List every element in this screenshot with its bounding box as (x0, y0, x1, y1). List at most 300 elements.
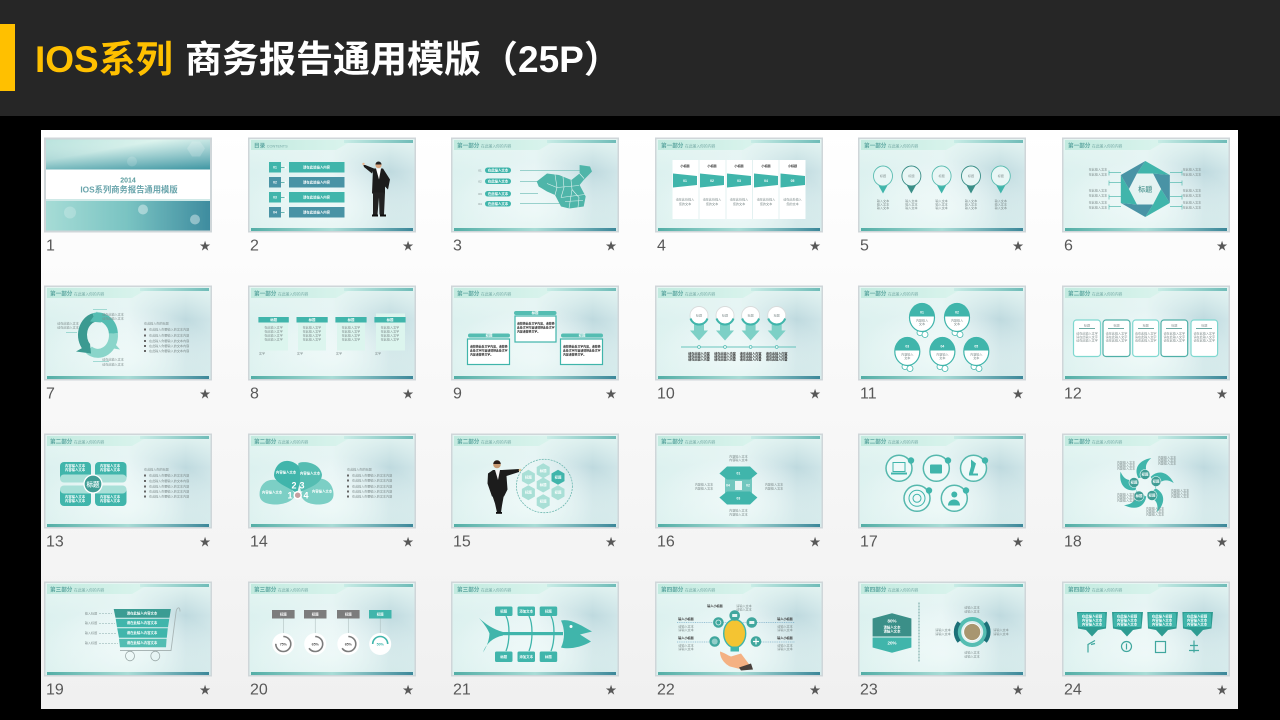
petal diagram: 4 (303, 490, 309, 500)
column cards: 在此输入文字 (342, 324, 360, 330)
cover top band (46, 140, 210, 170)
slide heading: 第二部分 在此输入你的内容 (1068, 290, 1123, 298)
tag shapes: 在此输入标题 (1082, 614, 1103, 618)
star icon: ★ (402, 238, 414, 254)
column cards: 文字 (297, 350, 303, 356)
star icon: ★ (1216, 386, 1228, 402)
bullet list: 在此输入你要输入的文本内容 (149, 484, 189, 488)
slide 9: hanging boxes (451, 286, 619, 380)
contents list: 01 (273, 166, 277, 170)
labels: 输入小标题 (678, 616, 695, 621)
white column panel: 您的文本 (786, 201, 799, 206)
slide heading: 第三部分 在此输入你的内容 (457, 586, 512, 594)
tag shapes: 内容输入文本 (1187, 618, 1208, 622)
numbered circles: 文本 (954, 321, 960, 326)
slide number 11: 11 (860, 386, 877, 402)
tag shapes: 内容输入文本 (1082, 622, 1103, 626)
slide heading: 第三部分 在此输入你的内容 (50, 586, 105, 594)
slide number 5: 5 (860, 238, 869, 254)
star icon: ★ (199, 386, 211, 402)
labels: 请输入文本 (777, 642, 793, 648)
column cards (258, 314, 406, 356)
cross diagram: 01 (737, 472, 740, 476)
pinwheel: 内容输入文本 (1158, 460, 1176, 466)
location pins: 输入文本 (965, 198, 977, 203)
labels: 请输入文本 (678, 624, 694, 628)
white column panel: 请在此处输入 (676, 196, 694, 202)
pill list: 03 (478, 192, 482, 196)
timeline: 标题 (722, 312, 728, 318)
shopping cart: 输入标题 (85, 630, 97, 635)
white column panel: 03 (737, 179, 741, 183)
bullet list: 在此输入你的标题 (144, 466, 169, 472)
slide 11: bubbles (858, 286, 1026, 380)
five cards: 标题 (1171, 322, 1177, 328)
slide heading: 第一部分 在此输入你的内容 (1068, 142, 1123, 150)
slide number 2: 2 (250, 238, 259, 254)
numbered circles: 内容输入 (970, 352, 982, 356)
five cards: 请在此输入文字 (1163, 330, 1185, 336)
cross diagram: 03 (737, 496, 740, 500)
text boxes: 内容请替换文字。 (563, 352, 586, 356)
pinwheel: 内容输入文本 (1146, 506, 1164, 510)
slide 7: cycle (44, 286, 212, 380)
cycle ring: 请在此输入文本 (102, 362, 124, 366)
numbered circles: 04 (941, 344, 944, 348)
cycle ring: 请在此输入文本 (102, 356, 124, 362)
slide 3: map (451, 138, 619, 232)
column cards: 在此输入文字 (264, 336, 283, 342)
star icon: ★ (605, 534, 617, 550)
star icon: ★ (1012, 682, 1024, 698)
slide heading: 第四部分 在此输入你的内容 (661, 586, 716, 594)
slide number 24: 24 (1064, 682, 1082, 698)
five cards: 请在此输入文字 (1163, 338, 1185, 342)
five cards: 请在此输入文字 (1193, 334, 1215, 339)
timeline: 请在此输入内容 (766, 354, 788, 358)
five cards: 请在此输入文字 (1076, 330, 1098, 336)
timeline: 请在此输入内容 (688, 354, 710, 358)
location pins: 输入文本 (935, 198, 948, 203)
labels: 请输入文本 (777, 627, 793, 632)
icon circles (886, 455, 988, 511)
slide number 18: 18 (1064, 534, 1082, 550)
slide number 7: 7 (46, 386, 55, 402)
white column panel: 您的文本 (679, 201, 691, 206)
tag shapes: 内容输入文本 (1152, 622, 1173, 626)
ring diagram: 请输入文本 (964, 654, 980, 658)
location pins: 输入文本 (905, 205, 918, 210)
slide heading: 第一部分 在此输入你的内容 (864, 290, 919, 298)
slide number 13: 13 (46, 534, 64, 550)
bullet list: 在此输入你要输入的文本内容 (352, 478, 392, 482)
labels: 输入小标题 (777, 635, 794, 640)
slide heading: 第一部分 在此输入你的内容 (254, 290, 309, 298)
businessman figure (488, 460, 521, 514)
star icon: ★ (402, 386, 414, 402)
progress rings: 标题 (345, 612, 352, 616)
column cards: 文字 (259, 350, 265, 356)
timeline: 请在此输入内容 (740, 354, 761, 358)
yellow accent bar (0, 24, 15, 91)
five cards: 请在此输入文字 (1135, 330, 1157, 336)
pinwheel: 内容输入文本 (1171, 494, 1189, 498)
column cards: 在此输入文字 (342, 328, 360, 334)
hexagon cluster: 标题 (525, 490, 532, 494)
pill list: 在此输入文本 (488, 201, 509, 206)
text boxes (468, 310, 603, 364)
cycle ring: 请在此输入文本 (102, 312, 124, 316)
text boxes: 请替换此处文字内容，请替换 (517, 320, 555, 326)
cross diagram: 内容输入文本 (729, 508, 748, 512)
shopping cart: 请在此输入内容文本 (127, 630, 158, 635)
star icon: ★ (1012, 238, 1024, 254)
white column panel: 04 (764, 179, 768, 183)
white column panel: 请在此处输入 (783, 196, 802, 202)
contents list: 02 (273, 180, 277, 184)
hexagon cluster: 标题 (540, 498, 547, 504)
contents list: 04 (273, 210, 277, 214)
percent shield: 请输入文本 (884, 628, 901, 634)
cross diagram: 04 (726, 484, 730, 488)
ring diagram: 请输入文本 (993, 631, 1009, 636)
text boxes: 此处文字内容请替换此处文字 (470, 348, 508, 352)
hexagon diagram (1089, 161, 1201, 217)
hexagon diagram: 在此输入文本 (1183, 204, 1201, 210)
timeline: 请在此输入内容 (688, 356, 710, 362)
location pins: 标题 (968, 173, 974, 178)
percent shield (873, 613, 911, 653)
location pins: 输入文本 (935, 205, 948, 210)
slide heading: 第一部分 在此输入你的内容 (50, 290, 105, 298)
cross diagram: 02 (746, 484, 750, 488)
column cards: 在此输入文字 (264, 324, 283, 330)
hexagon diagram: 在此输入文本 (1089, 188, 1107, 192)
five cards: 请在此输入文字 (1106, 330, 1127, 336)
slide heading: 第一部分 在此输入你的内容 (864, 142, 919, 150)
timeline: 请在此输入内容 (740, 350, 761, 356)
white column panel: 01 (683, 179, 687, 183)
contents list: 03 (273, 196, 277, 200)
petal diagram: 内容输入文本 (312, 488, 333, 494)
pinwheel: 内容输入文本 (1117, 462, 1135, 468)
tag shapes: 内容输入文本 (1152, 618, 1173, 622)
slide number 4: 4 (657, 238, 666, 254)
white column panel: 您的文本 (733, 201, 745, 206)
pill list: 01 (478, 168, 482, 172)
slide 1: cover (44, 138, 212, 232)
slide number 1: 1 (46, 238, 55, 254)
China map (537, 165, 592, 208)
star icon: ★ (1216, 682, 1228, 698)
column cards: 在此输入文字 (381, 332, 399, 338)
hexagon cluster: 标题 (555, 490, 562, 494)
slide heading: 第一部分 在此输入你的内容 (661, 290, 716, 298)
text boxes: 此处文字内容请替换此处文字 (563, 348, 601, 352)
five cards: 标题 (1201, 322, 1207, 328)
five cards: 请在此输入文字 (1193, 330, 1215, 336)
numbered circles: 内容输入 (916, 318, 928, 322)
five cards: 请在此输入文字 (1163, 334, 1185, 339)
fishbone diagram: 标题 (545, 654, 552, 659)
location pins: 输入文本 (905, 198, 918, 203)
five cards: 标题 (1143, 322, 1149, 328)
star icon: ★ (605, 238, 617, 254)
star icon: ★ (402, 682, 414, 698)
slide 20: progress rings (248, 582, 416, 676)
petal diagram: 2 (291, 480, 297, 490)
petal diagram: 3 (299, 480, 305, 490)
fishbone diagram (479, 606, 592, 662)
slide 16: cross shape (655, 434, 823, 528)
text boxes: 请替换此处文字内容，请替换 (563, 344, 601, 348)
white column panel: 您的文本 (706, 201, 718, 206)
bullet list: 在此输入你要输入的文本内容 (149, 326, 189, 332)
cycle ring: 请在此输入文本 (102, 316, 124, 320)
bullet list: 在此输入你要输入的文本内容 (149, 494, 189, 498)
star icon: ★ (199, 682, 211, 698)
slide 12: cards (1062, 286, 1230, 380)
title: IOS系列 (35, 39, 173, 80)
text boxes: 标题 (486, 332, 493, 338)
location pins: 输入文本 (877, 202, 889, 206)
column cards: 标题 (348, 317, 355, 322)
white column panel: 请在此处输入 (757, 196, 775, 202)
location pins: 输入文本 (995, 202, 1007, 206)
location pins: 输入文本 (935, 202, 948, 206)
column cards: 在此输入文字 (264, 332, 283, 338)
column cards: 在此输入文字 (303, 328, 321, 334)
star icon: ★ (809, 534, 821, 550)
white thumbnail panel (41, 130, 1238, 709)
four block diagram: 内容输入文本 (100, 494, 121, 499)
ring diagram: 请输入文本 (964, 650, 980, 654)
tag shapes: 在此输入标题 (1152, 614, 1173, 618)
ring diagram (935, 604, 1009, 658)
bullet list (347, 466, 392, 498)
slide thumbnails (44, 138, 1230, 698)
petal diagram: 内容输入文本 (276, 470, 297, 474)
pinwheel: 内容输入文本 (1158, 458, 1176, 462)
pinwheel: 内容输入文本 (1117, 498, 1135, 502)
location pins: 输入文本 (995, 198, 1007, 203)
timeline: 请在此输入内容 (766, 350, 788, 356)
contents list: 请在此处输入内容 (303, 180, 331, 184)
column cards: 标题 (270, 317, 278, 322)
star icon: ★ (605, 386, 617, 402)
four block diagram: 标题 (86, 480, 100, 488)
progress rings: 65% (312, 642, 320, 646)
numbered circles: 内容输入 (901, 352, 913, 356)
businessman figure (362, 162, 390, 216)
tag shapes: 内容输入文本 (1117, 618, 1138, 622)
numbered circles: 内容输入 (951, 318, 963, 322)
slide heading: 第二部分 在此输入你的内容 (661, 438, 716, 446)
white column panel: 小标题 (734, 163, 745, 168)
column cards: 在此输入文字 (303, 324, 321, 330)
four block diagram: 内容输入文本 (100, 467, 121, 472)
cross diagram: 内容输入文本 (729, 512, 748, 516)
slide heading: 第二部分 在此输入你的内容 (864, 438, 919, 446)
slide 6: hexagon (1062, 138, 1230, 232)
timeline: 标题 (774, 312, 780, 318)
five cards: 标题 (1113, 322, 1120, 328)
location pins: 标题 (998, 173, 1004, 178)
numbered circles: 文本 (904, 355, 910, 360)
slide number 20: 20 (250, 682, 268, 698)
pinwheel: 标题 (1136, 493, 1143, 498)
cover title: 2014 (120, 178, 136, 184)
dashed divider (918, 602, 920, 662)
bullet list: 在此输入你要输入的文本内容 (149, 478, 189, 483)
slide 22: light bulb (655, 582, 823, 676)
pinwheel: 标题 (1149, 492, 1156, 498)
slide heading: 目录 CONTENTS (254, 142, 288, 150)
column cards: 在此输入文字 (342, 332, 360, 338)
text boxes: 内容请替换文字。 (517, 328, 540, 334)
five cards: 标题 (1084, 322, 1090, 328)
percent shield: 20% (887, 640, 897, 646)
slide number 19: 19 (46, 682, 64, 698)
fishbone diagram: 添加文本 (519, 654, 534, 659)
progress rings: 65% (345, 642, 353, 646)
five cards: 请在此输入文字 (1193, 338, 1215, 342)
numbered circles (895, 304, 989, 372)
pill list: 04 (478, 202, 482, 206)
location pins: 标题 (939, 173, 945, 178)
bullet list: 在此输入你要输入的文本内容 (352, 484, 392, 488)
star icon: ★ (199, 238, 211, 254)
timeline (681, 306, 796, 362)
four block diagram: 内容输入文本 (65, 494, 86, 499)
cross diagram: 内容输入文本 (695, 482, 713, 486)
five cards: 请在此输入文字 (1135, 334, 1157, 339)
labels: 请输入文本 (777, 624, 793, 628)
shopping cart: 输入标题 (85, 640, 97, 645)
hexagon cluster: 标题 (540, 482, 547, 487)
numbered circles: 文本 (973, 355, 979, 360)
white column panel: 小标题 (761, 163, 772, 168)
location pins: 输入文本 (995, 205, 1007, 210)
shopping cart: 请在此输入内容文本 (127, 620, 158, 625)
hexagon cluster: 标题 (525, 474, 532, 480)
column cards: 在此输入文字 (381, 328, 399, 334)
slide heading: 第一部分 在此输入你的内容 (457, 142, 512, 150)
pill list (478, 168, 580, 206)
shopping cart (85, 608, 180, 661)
location pins (874, 166, 1010, 210)
labels: 请输入文本 (678, 642, 694, 648)
four block diagram: 内容输入文本 (65, 498, 86, 503)
slide 14: petals (248, 434, 416, 528)
column cards: 标题 (387, 317, 394, 322)
timeline: 请在此输入内容 (714, 350, 736, 356)
shopping cart: 请在此输入内容文本 (127, 640, 158, 645)
slide number 14: 14 (250, 534, 268, 550)
slide number 22: 22 (657, 682, 675, 698)
ring diagram: 请输入文本 (935, 631, 951, 636)
ring diagram: 请输入文本 (993, 627, 1009, 632)
five cards: 请在此输入文字 (1135, 338, 1157, 342)
shopping cart: 输入标题 (85, 610, 97, 616)
slide heading: 第一部分 在此输入你的内容 (661, 142, 716, 150)
timeline: 请在此输入内容 (766, 356, 788, 362)
timeline: 请在此输入内容 (714, 356, 736, 362)
column cards: 标题 (309, 317, 316, 322)
pinwheel: 标题 (1153, 478, 1160, 484)
star icon: ★ (809, 386, 821, 402)
location pins: 标题 (880, 173, 886, 178)
slide number 15: 15 (453, 534, 471, 550)
slide number 21: 21 (453, 682, 471, 698)
petal diagram: 1 (287, 490, 293, 500)
cross diagram: 内容输入文本 (729, 454, 748, 458)
pinwheel: 内容输入文本 (1146, 512, 1164, 516)
pinwheel: 内容输入文本 (1117, 492, 1135, 496)
hexagon diagram: 在此输入文本 (1089, 172, 1107, 176)
bullet list: 在此输入你的标题 (144, 320, 169, 326)
slide 2: contents (248, 138, 416, 232)
bullet list: 在此输入你的标题 (347, 466, 372, 472)
star icon: ★ (809, 238, 821, 254)
timeline: 请在此输入内容 (714, 354, 736, 358)
cycle ring (57, 310, 124, 366)
fishbone diagram: 添加文本 (519, 608, 534, 614)
title: 商务报告通用模版（25P） (185, 39, 621, 80)
pinwheel: 内容输入文本 (1171, 490, 1189, 496)
slide 10: timeline arrows (655, 286, 823, 380)
five cards: 请在此输入文字 (1106, 338, 1127, 342)
slide 4: five columns (655, 138, 823, 232)
four block diagram: 内容输入文本 (65, 467, 86, 472)
contents list (269, 162, 344, 218)
tag shapes (1077, 612, 1213, 636)
labels (678, 603, 794, 651)
numbered circles: 03 (905, 344, 909, 348)
column cards: 在此输入文字 (303, 336, 321, 342)
labels: 输入小标题 (678, 635, 695, 640)
contents list: 请在此处输入内容 (303, 210, 331, 214)
cross diagram: 内容输入文本 (765, 486, 783, 490)
slide 5: pins (858, 138, 1026, 232)
bullet list: 在此输入你要输入的文本内容 (352, 488, 392, 494)
star icon: ★ (1216, 534, 1228, 550)
four block diagram: 内容输入文本 (65, 463, 86, 468)
bullet list: 在此输入你要输入的文本内容 (149, 488, 189, 494)
white column panel: 小标题 (788, 163, 798, 168)
bullet list: 在此输入你要输入的文本内容 (149, 332, 189, 338)
petal diagram: 内容输入文本 (300, 470, 321, 476)
percent shield: 请输入文本 (884, 624, 901, 630)
slide heading: 第四部分 在此输入你的内容 (1068, 586, 1123, 594)
four block diagram: 内容输入文本 (100, 463, 121, 468)
slide heading: 第二部分 在此输入你的内容 (254, 438, 309, 446)
location pins: 输入文本 (965, 205, 977, 210)
slide heading: 第二部分 在此输入你的内容 (457, 438, 512, 446)
labels: 请输入文本 (777, 646, 793, 651)
pill list: 在此输入文本 (488, 191, 509, 196)
cover title: IOS系列商务报告通用模版 (80, 184, 178, 194)
pinwheel (1116, 454, 1189, 516)
slide heading: 第四部分 在此输入你的内容 (864, 586, 919, 594)
slide number 17: 17 (860, 534, 878, 550)
slide number 12: 12 (1064, 386, 1082, 402)
small icons (1088, 640, 1199, 652)
tag shapes: 在此输入标题 (1187, 614, 1208, 618)
slide 17: icons (858, 434, 1026, 528)
location pins: 输入文本 (877, 205, 889, 210)
labels: 输入小标题 (777, 616, 794, 621)
